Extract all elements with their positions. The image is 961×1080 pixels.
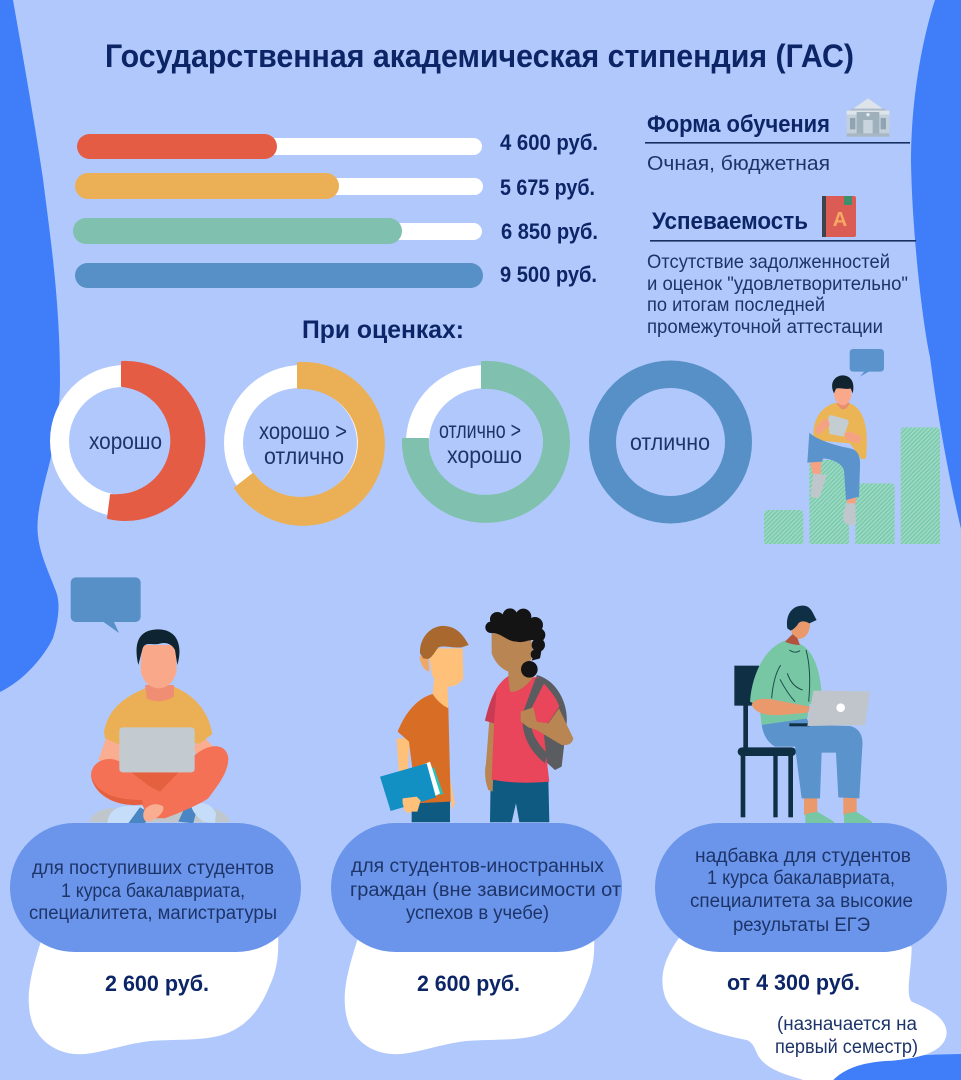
pill: exam bonus: специалитета за высокие: [690, 891, 913, 912]
text: performance description: Отсутствие задолженностей: [647, 252, 890, 273]
pill: exam bonus: [655, 823, 947, 952]
pill: new students: 1 курса бакалавриата,: [61, 881, 245, 902]
boy with books: [380, 626, 469, 822]
pill: new students: специалитета, магистратуры: [29, 903, 277, 924]
white blob 1: [29, 935, 278, 1054]
pill: foreign students: для студентов-иностранных: [351, 856, 604, 877]
pill: foreign students: граждан (вне зависимости от: [350, 880, 621, 901]
chair: [734, 666, 796, 817]
donut: excellent: [589, 360, 752, 524]
bar: 6 850: [73, 218, 598, 244]
heading: grades: При оценках:: [302, 316, 464, 344]
illustration: student on chair: [734, 606, 872, 823]
pill: exam bonus: результаты ЕГЭ: [733, 915, 870, 936]
text: study form value: Очная, бюджетная: [647, 152, 830, 175]
donut: excellent and good: отлично >: [439, 417, 521, 443]
donut: excellent and good: [403, 362, 569, 522]
white blob 2: [345, 935, 594, 1054]
donut: good and excellent: хорошо >: [259, 418, 347, 444]
text: performance description: [647, 252, 908, 338]
pill: exam bonus: надбавка для студентов: [695, 846, 911, 867]
girl with backpack: [485, 608, 573, 822]
bar: 5 675: [75, 173, 595, 200]
donut: excellent: отлично: [630, 429, 710, 455]
illustration: student with laptop on floor: [71, 577, 230, 823]
heading: study form: Форма обучения: [647, 111, 830, 138]
hatched bars: [764, 427, 940, 544]
pill: foreign students: [331, 823, 622, 952]
bar: 5 675: 5 675 руб.: [500, 175, 595, 200]
icon: speech bubble: [850, 349, 884, 377]
illustration: two students: [380, 608, 573, 822]
bottom right background blob: [828, 1054, 961, 1080]
progress bars: [73, 130, 598, 288]
pill: new students: [10, 823, 301, 952]
icon: book: [822, 196, 856, 237]
pill: foreign students: успехов в учебе): [406, 903, 549, 924]
icon: university building: [847, 98, 889, 137]
note: first semester: первый семестр): [775, 1037, 918, 1058]
bar: 4 600: [77, 130, 598, 159]
pill: new students: для поступивших студентов: [32, 858, 274, 879]
icon: speech bubble: [71, 577, 141, 633]
student: [89, 629, 230, 823]
panel: study form: [645, 98, 910, 175]
title: Государственная академическая стипендия (ГАС): [105, 38, 854, 74]
donut: good and excellent: отлично: [264, 443, 344, 469]
text: performance description: и оценок "удовлетворительно": [647, 274, 908, 295]
bar: 4 600: 4 600 руб.: [500, 130, 598, 155]
illustration: student on bar chart: [764, 349, 940, 544]
bar: 9 500: 9 500 руб.: [500, 262, 597, 287]
note: first semester: (назначается на: [777, 1014, 917, 1035]
pill: exam bonus: 1 курса бакалавриата,: [707, 868, 895, 889]
amount: foreign students: 2 600 руб.: [417, 971, 520, 996]
white blob 3: [662, 937, 947, 1080]
right background blob: [911, 0, 961, 529]
text: performance description: по итогам последней: [647, 295, 825, 316]
heading: performance: Успеваемость: [652, 208, 808, 235]
donut: good: [50, 362, 204, 520]
text: performance description: промежуточной аттестации: [647, 317, 883, 338]
amount: new students: 2 600 руб.: [105, 971, 209, 996]
icon: book: A: [833, 209, 847, 231]
amount: exam bonus: от 4 300 руб.: [727, 970, 860, 995]
bar: 6 850: 6 850 руб.: [501, 219, 598, 244]
donut: excellent and good: хорошо: [447, 442, 522, 468]
donut: good and excellent: [224, 363, 384, 525]
left background blob: [0, 0, 60, 692]
bar: 9 500: [75, 262, 597, 288]
note: first semester: [775, 1014, 918, 1058]
panel: academic performance: [647, 196, 916, 338]
donut: good: хорошо: [89, 428, 162, 454]
student: [750, 606, 872, 823]
seated student: [807, 375, 867, 525]
